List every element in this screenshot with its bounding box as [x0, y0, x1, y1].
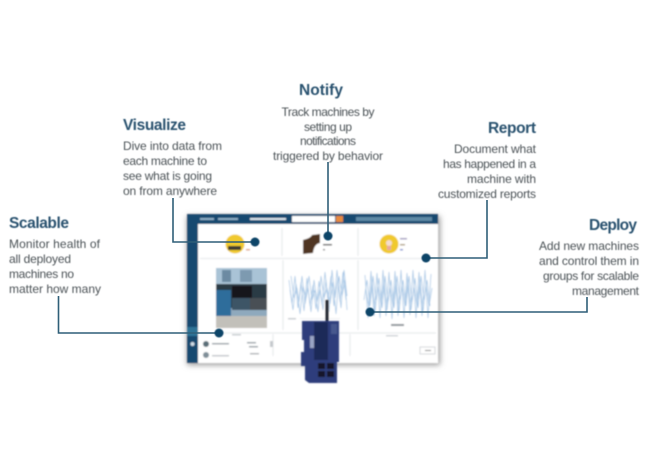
text labels: [9, 82, 640, 298]
gauge icon: yellow circle: [226, 234, 250, 254]
Notify text block: triggered by behavior: [273, 149, 383, 163]
connector: Visualize: [173, 198, 255, 242]
Notify text block: setting up: [304, 120, 352, 134]
Report text block: [438, 120, 537, 201]
line chart: left: [288, 270, 347, 320]
connector: Deploy: [370, 297, 587, 312]
icon: brown pipe elbow: [303, 234, 332, 254]
device body: [301, 321, 339, 383]
Report text block: customized reports: [438, 187, 536, 201]
connector: Notify: [327, 162, 329, 236]
Deploy text block: [539, 217, 640, 298]
Notify text block: [273, 82, 383, 163]
Report text block: Document what: [454, 142, 537, 156]
Scalable text block: all deployed: [9, 252, 71, 266]
Visualize text block: Dive into data from: [123, 139, 222, 153]
Visualize text block: each machine to: [123, 154, 207, 168]
Visualize text block: Visualize: [123, 117, 186, 134]
Visualize text block: see what is going: [123, 169, 212, 183]
screen background: [187, 214, 438, 363]
Notify text block: Notify: [299, 82, 343, 99]
Scalable text block: machines no: [9, 267, 74, 281]
marker dots: [214, 232, 430, 338]
icon: yellow circle with figure: [380, 234, 407, 254]
screen shadow: [187, 216, 440, 365]
Report text block: has happened in a: [443, 157, 536, 171]
connector: Scalable: [58, 296, 219, 333]
top navigation bar: [187, 214, 438, 224]
left sidebar: [187, 224, 198, 363]
bottom right panel with button: [386, 335, 435, 354]
Deploy text block: Deploy: [589, 217, 637, 234]
dashboard screenshot: [187, 214, 440, 365]
Notify text block: Track machines by: [282, 105, 374, 119]
Report text block: machine with: [467, 172, 536, 186]
Scalable text block: [9, 215, 101, 296]
bottom list panel: [203, 334, 273, 358]
Visualize text block: [123, 117, 222, 198]
Deploy text block: groups for scalable: [543, 269, 639, 283]
Report text block: Report: [488, 120, 536, 137]
Deploy text block: management: [572, 284, 640, 298]
Scalable text block: Scalable: [9, 215, 69, 232]
Scalable text block: Monitor health of: [9, 237, 101, 251]
Scalable text block: matter how many: [9, 282, 101, 296]
Deploy text block: and control them in: [539, 254, 639, 268]
antenna: [326, 300, 328, 324]
Notify text block: notifications: [300, 134, 356, 148]
Deploy text block: Add new machines: [539, 239, 639, 253]
Visualize text block: on from anywhere: [123, 184, 217, 198]
line chart: right: [364, 270, 432, 326]
gateway device: [301, 300, 339, 383]
machine photo: [216, 268, 267, 328]
ethernet ports: [318, 363, 334, 377]
connector: Report: [426, 200, 487, 258]
panel dividers: [200, 228, 436, 356]
